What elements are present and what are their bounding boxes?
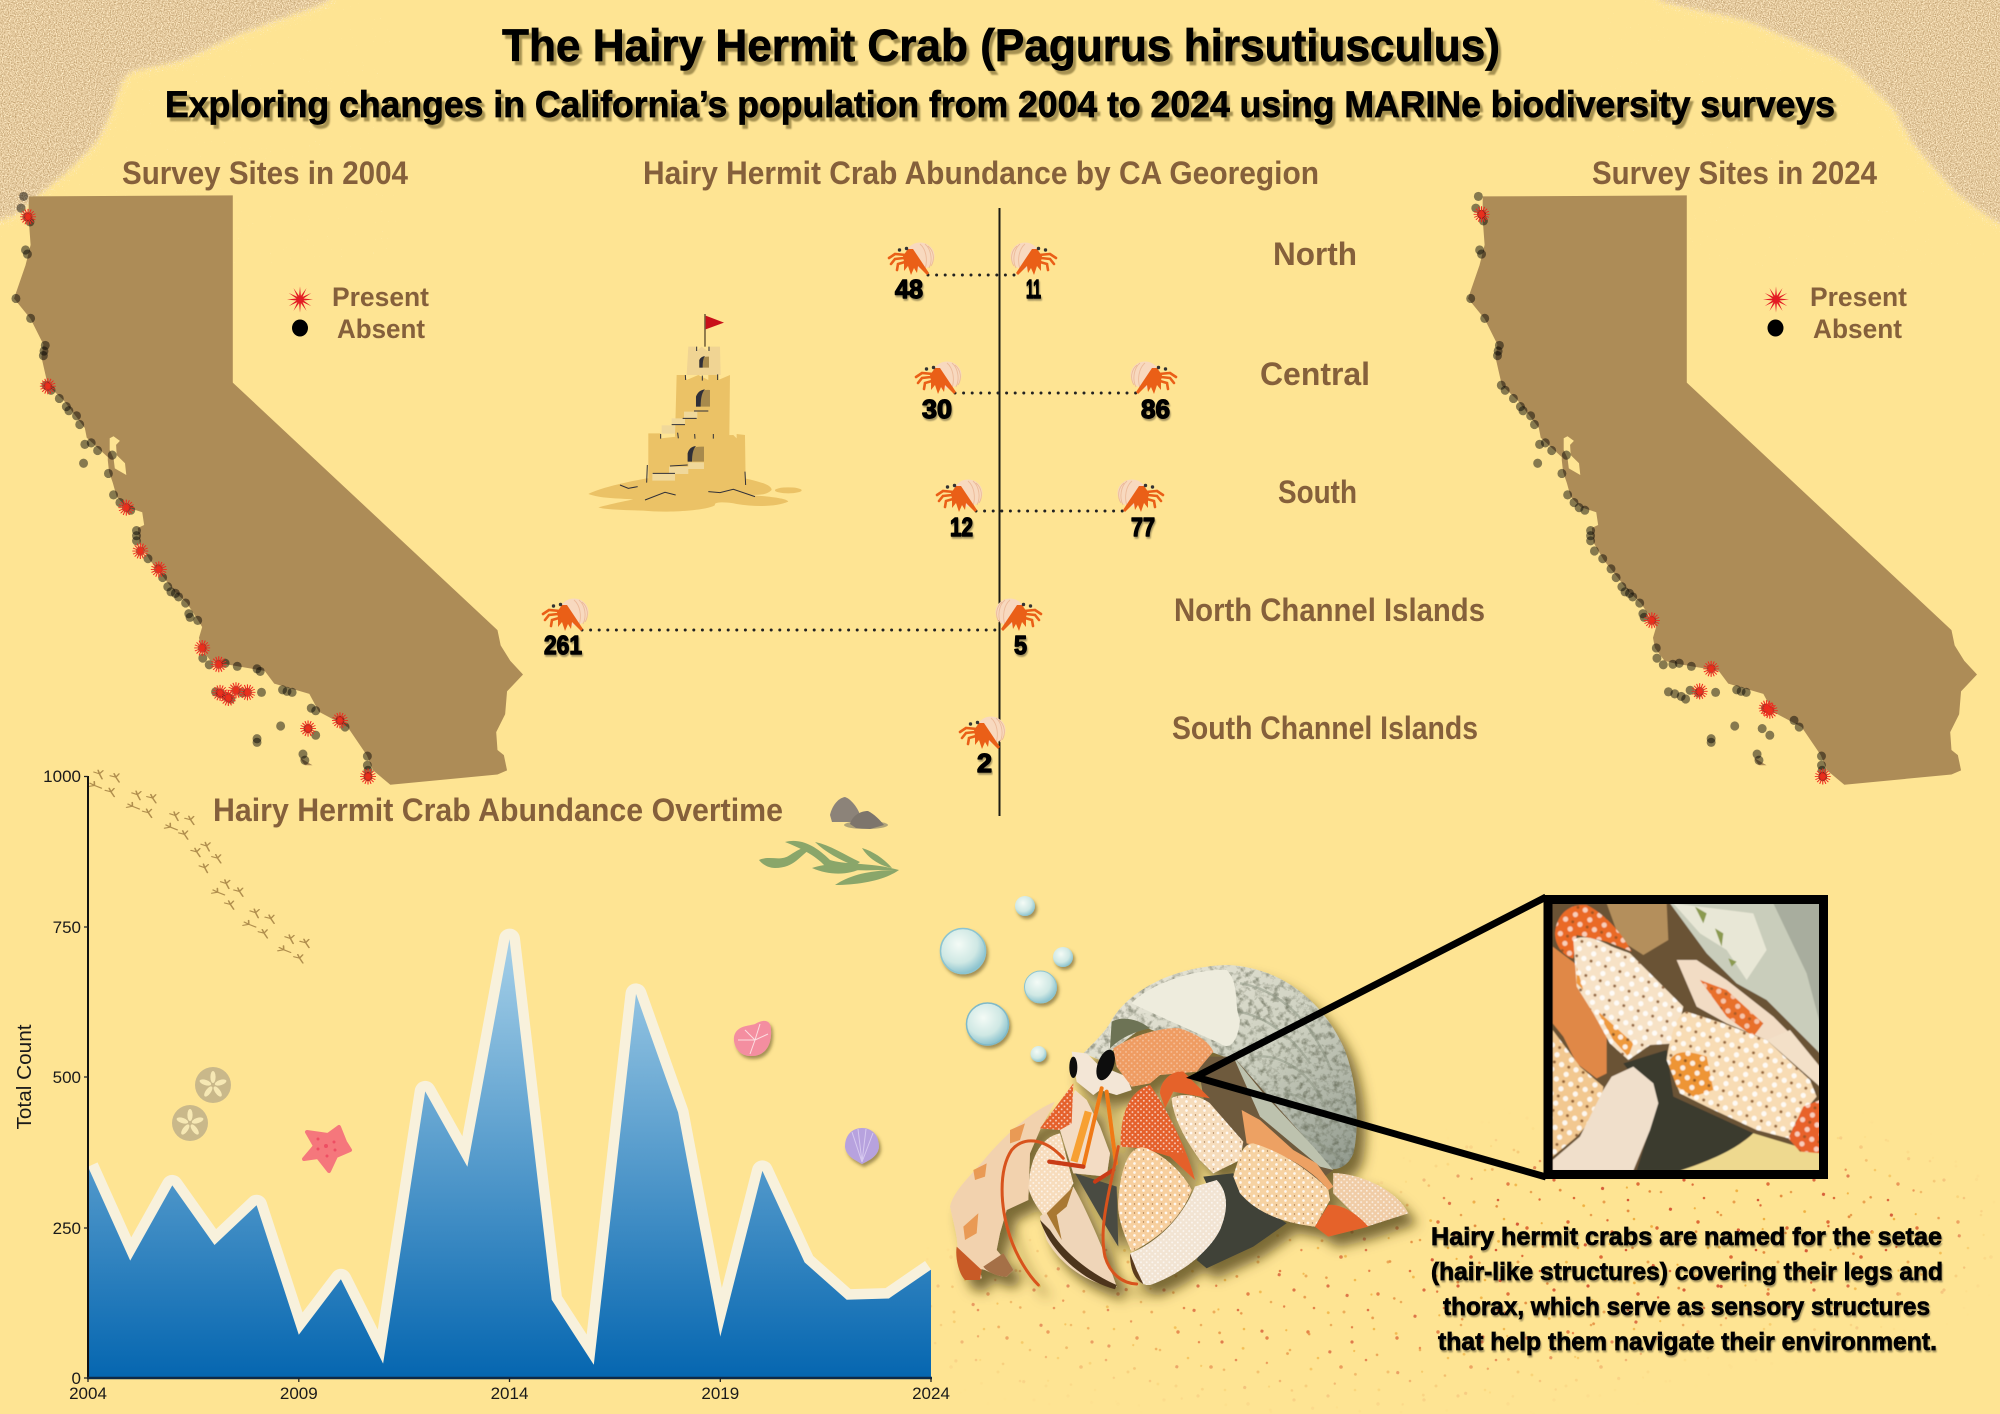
far left leg bbox=[950, 1102, 1055, 1279]
axes: 2014 bbox=[491, 1384, 528, 1403]
eye stalks and eyes bbox=[1072, 1052, 1132, 1095]
row: Central: Central bbox=[1260, 356, 1370, 392]
row: North: 48 bbox=[895, 274, 923, 304]
text block: setae explanation: (hair-like structures) covering their legs and bbox=[1431, 1258, 1943, 1286]
carapace bbox=[1113, 1028, 1213, 1087]
white claw bbox=[1130, 1180, 1226, 1285]
third segment bbox=[1233, 1143, 1330, 1227]
row: Central bbox=[916, 356, 1370, 424]
legend 2024: Absent bbox=[1813, 314, 1902, 344]
orange middle leg bbox=[1242, 1110, 1333, 1190]
sand speckle bbox=[931, 1136, 1992, 1410]
axes: 2019 bbox=[701, 1384, 739, 1403]
subtitle: Exploring changes in California’s population from 2004 to 2024 using MARINe biodiversity surveys bbox=[165, 84, 1835, 125]
heading: survey sites 2004: Survey Sites in 2004 bbox=[122, 155, 408, 191]
area chart: abundance over time bbox=[14, 767, 950, 1403]
legend 2024 bbox=[1763, 282, 1907, 344]
axes: 2009 bbox=[280, 1384, 318, 1403]
axes bbox=[43, 767, 950, 1403]
row: North Channel Islands: 261 bbox=[544, 630, 582, 660]
row: South Channel Islands bbox=[960, 710, 1478, 778]
legend 2004 bbox=[287, 282, 429, 344]
text block: setae explanation: thorax, which serve as sensory structures bbox=[1443, 1293, 1930, 1321]
axes: 750 bbox=[53, 918, 81, 937]
shell interior bbox=[1197, 1057, 1333, 1180]
decor: seaweed bbox=[759, 841, 899, 885]
antennae bbox=[1002, 1141, 1137, 1285]
row: South Channel Islands: South Channel Islands bbox=[1172, 710, 1478, 746]
row: North Channel Islands: North Channel Islands bbox=[1174, 592, 1485, 628]
mouth parts bbox=[1074, 1112, 1088, 1162]
shell bbox=[1083, 965, 1357, 1169]
legend 2004: Present bbox=[332, 282, 429, 312]
legend 2004: Absent bbox=[337, 314, 425, 344]
axes: 250 bbox=[53, 1219, 81, 1238]
decor: sand dollars bbox=[172, 1067, 231, 1141]
sand corner top left bbox=[0, 0, 340, 225]
sand corner top right bbox=[1655, 0, 2000, 228]
illustration: sandcastle bbox=[588, 314, 802, 512]
axis line bbox=[998, 208, 1000, 816]
row: North Channel Islands bbox=[543, 592, 1485, 660]
decor: starfish bbox=[304, 1127, 350, 1171]
main title: The Hairy Hermit Crab (Pagurus hirsutiusculus) bbox=[502, 20, 1500, 71]
row: South: 12 bbox=[950, 512, 973, 542]
row: Central: 86 bbox=[1141, 394, 1170, 424]
row: South Channel Islands: 2 bbox=[977, 748, 992, 778]
axes: 2004 bbox=[69, 1384, 107, 1403]
main claw bbox=[1121, 1085, 1195, 1180]
decor: pink shell bbox=[734, 1021, 771, 1056]
decor: bird tracks bbox=[88, 769, 313, 964]
axes: 2024 bbox=[912, 1384, 950, 1403]
row: North bbox=[889, 236, 1357, 304]
decor: bubbles bbox=[940, 896, 1073, 1062]
callout lines bbox=[1196, 897, 1546, 1177]
illustration: hermit crab bbox=[950, 965, 1408, 1289]
map: California 2004 bbox=[11, 192, 523, 785]
inset: close-up of setae bbox=[1540, 890, 1835, 1185]
row: South bbox=[937, 474, 1357, 542]
text block: setae explanation bbox=[1431, 1223, 1943, 1356]
second leg bbox=[1172, 1095, 1243, 1173]
text block: setae explanation: that help them navigate their environment. bbox=[1438, 1328, 1937, 1356]
lollipop chart: abundance by georegion bbox=[543, 208, 1485, 816]
axes: 0 bbox=[72, 1369, 81, 1388]
heading: abundance by georegion: Hairy Hermit Crab Abundance by CA Georegion bbox=[643, 155, 1319, 191]
chart title: Hairy Hermit Crab Abundance Overtime bbox=[213, 792, 783, 828]
decor: purple shell bbox=[845, 1128, 879, 1164]
y axis title: Total Count bbox=[14, 1024, 36, 1130]
axes: 1000 bbox=[43, 767, 81, 786]
axes: 500 bbox=[53, 1068, 81, 1087]
map: California 2024 bbox=[1466, 192, 1977, 785]
dark underside bbox=[1197, 1173, 1287, 1268]
back leg bbox=[1333, 1173, 1408, 1227]
left claw bbox=[1060, 1090, 1110, 1177]
row: North: 11 bbox=[1026, 274, 1041, 304]
text block: setae explanation: Hairy hermit crabs are named for the setae bbox=[1431, 1223, 1942, 1251]
decor: rocks bbox=[830, 797, 888, 829]
row: South: 77 bbox=[1131, 512, 1155, 542]
row: South: South bbox=[1278, 474, 1357, 510]
row: North: North bbox=[1273, 236, 1357, 272]
filled area bbox=[88, 939, 931, 1378]
legend 2024: Present bbox=[1810, 282, 1907, 312]
row: North Channel Islands: 5 bbox=[1014, 630, 1027, 660]
row: Central: 30 bbox=[922, 394, 952, 424]
heading: survey sites 2024: Survey Sites in 2024 bbox=[1592, 155, 1877, 191]
